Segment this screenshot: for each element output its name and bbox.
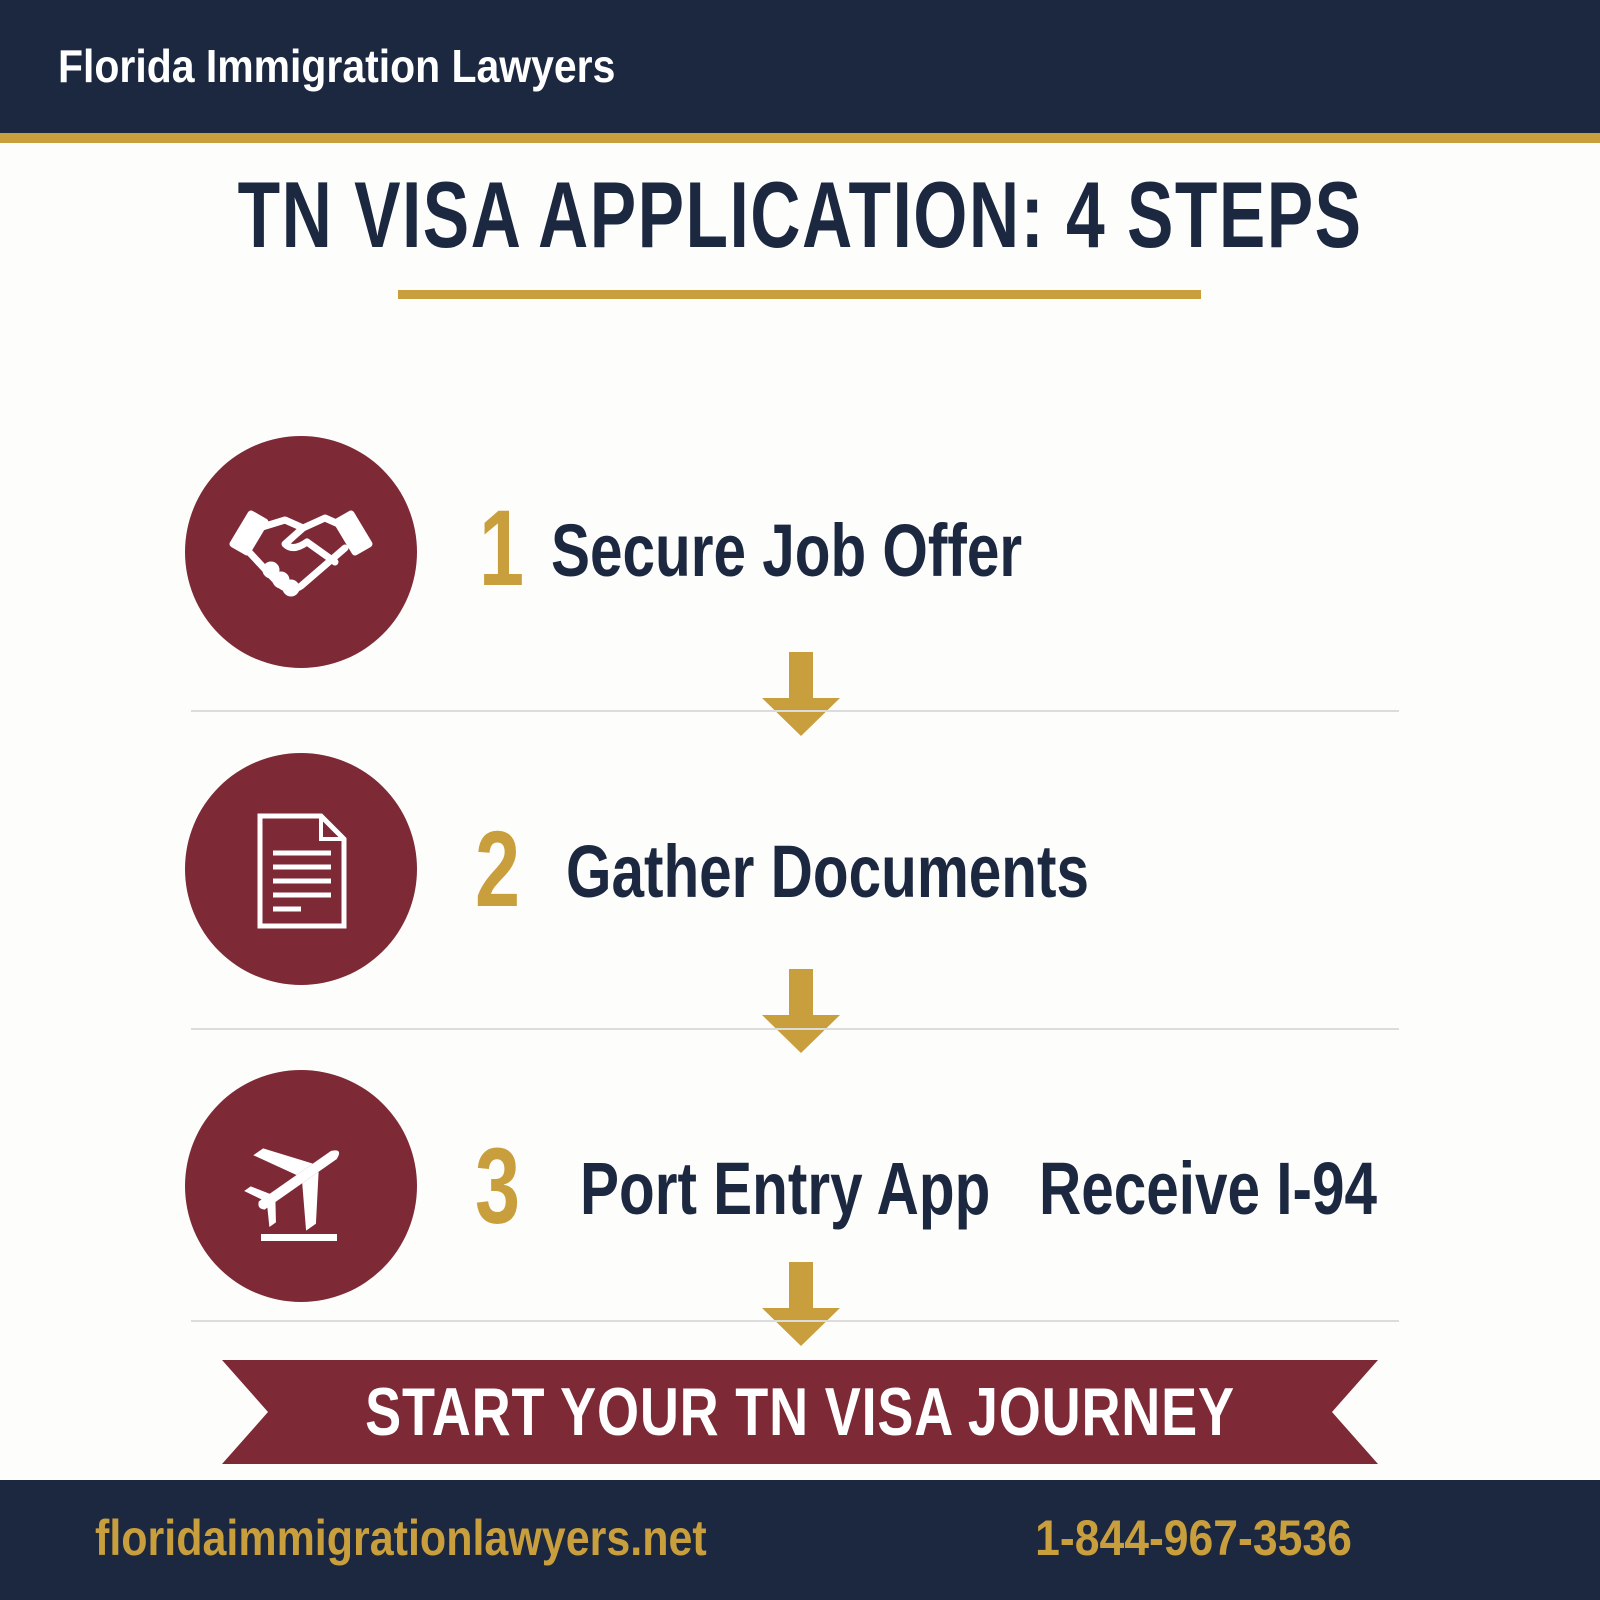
- phone: 1-844-967-3536: [1035, 1510, 1352, 1566]
- arrow 1: [762, 652, 840, 736]
- arrow 3: [762, 1262, 840, 1346]
- website: floridaimmigrationlawyers.net: [95, 1510, 707, 1566]
- icon: airplane: [185, 1070, 417, 1302]
- number 2: 2: [475, 808, 520, 929]
- number 3: 3: [475, 1125, 520, 1246]
- title underline: [398, 290, 1201, 299]
- step 1: [185, 436, 1022, 668]
- header bar: [0, 0, 1600, 133]
- step text: Gather Documents: [566, 830, 1089, 913]
- footer bar: [0, 1480, 1600, 1600]
- step 2: [185, 753, 1089, 985]
- number 1: 1: [479, 487, 524, 608]
- title: TN VISA APPLICATION: 4 STEPS: [238, 162, 1362, 267]
- banner: call to action: [222, 1360, 1378, 1464]
- header brand text: Florida Immigration Lawyers: [58, 40, 615, 92]
- icon: document: [185, 753, 417, 985]
- arrow 2: [762, 969, 840, 1053]
- banner: call to action: START YOUR TN VISA JOURNEY: [365, 1374, 1235, 1450]
- step 3: [185, 1070, 1377, 1302]
- step text: Secure Job Offer: [551, 509, 1022, 592]
- step text: Port Entry App Receive I-94: [580, 1147, 1377, 1230]
- icon: handshake: [185, 436, 417, 668]
